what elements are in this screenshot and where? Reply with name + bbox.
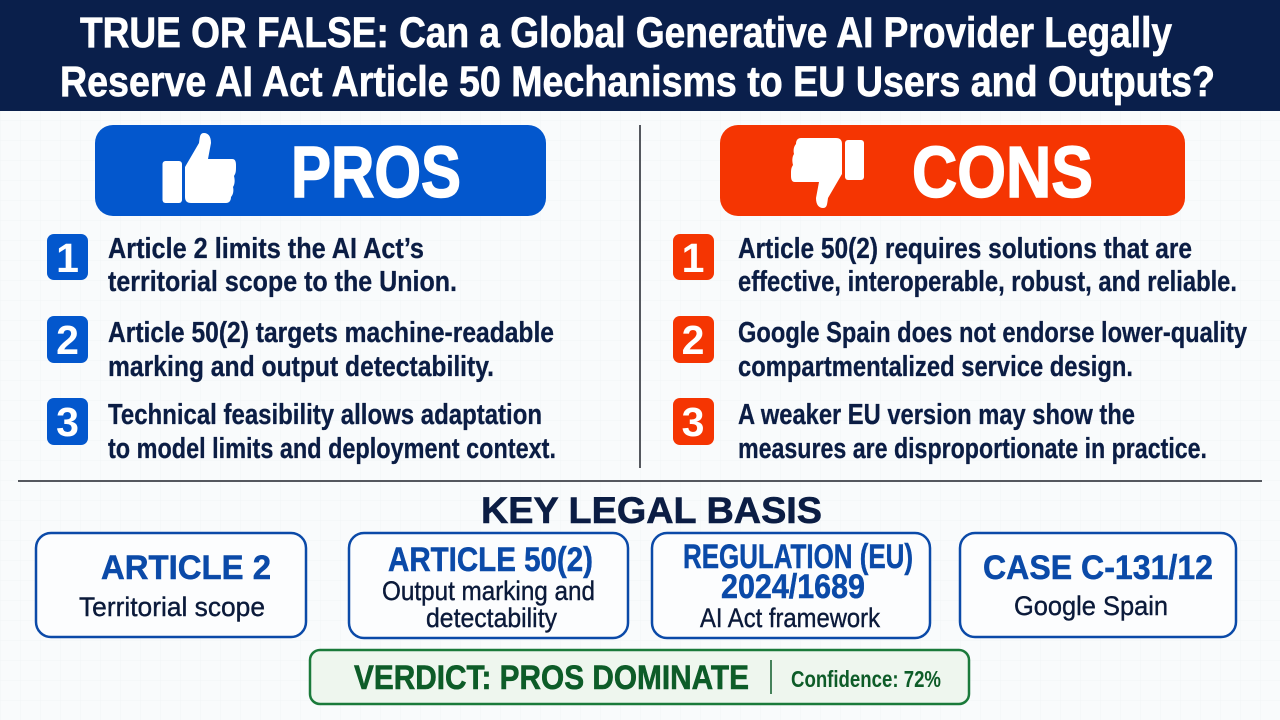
pros item 3 <box>47 398 556 465</box>
panel: cons <box>673 125 1247 465</box>
card: case c-131/12: CASE C-131/12 <box>983 549 1213 587</box>
card: regulation: AI Act framework <box>700 603 880 633</box>
pros item 3: 3 <box>56 399 79 445</box>
card: regulation <box>652 533 930 638</box>
heading: key legal basis: KEY LEGAL BASIS <box>481 490 822 531</box>
pros label: PROS <box>291 133 461 213</box>
pros header <box>95 125 546 216</box>
card: article 50(2): ARTICLE 50(2) <box>388 541 593 579</box>
cons item 2 <box>673 316 1247 383</box>
pros item 2: 2 <box>56 317 79 363</box>
pros item 2: Article 50(2) targets machine-readable <box>108 317 554 349</box>
confidence: Confidence: 72% <box>791 666 941 692</box>
card: case c-131/12: Google Spain <box>1014 591 1168 621</box>
pros item 1: territorial scope to the Union. <box>108 266 457 298</box>
cons item 2: 2 <box>682 317 704 363</box>
card: article 50(2): detectability <box>426 603 557 633</box>
pros item 2 <box>47 316 554 383</box>
panel: pros <box>47 125 556 465</box>
pros item 3: Technical feasibility allows adaptation <box>108 399 542 431</box>
card: article 2: Territorial scope <box>79 592 265 622</box>
title text <box>60 9 1215 106</box>
cons item 3: A weaker EU version may show the <box>738 399 1135 431</box>
verdict bar <box>310 650 969 704</box>
card: article 50(2) <box>349 533 628 638</box>
pros item 1: 1 <box>56 235 79 281</box>
icon: thumbs up <box>162 133 236 203</box>
cons item 2: compartmentalized service design. <box>738 351 1133 383</box>
cons item 3 <box>673 398 1207 465</box>
cons item 3: 3 <box>682 399 704 445</box>
cons header <box>720 125 1185 216</box>
pros item 2: marking and output detectability. <box>108 351 494 383</box>
title banner <box>0 0 1280 111</box>
verdict text: VERDICT: PROS DOMINATE <box>354 659 749 697</box>
card: regulation: REGULATION (EU) <box>683 538 913 576</box>
card: article 2: ARTICLE 2 <box>101 549 271 587</box>
card: regulation: 2024/1689 <box>721 568 865 606</box>
card: article 50(2): Output marking and <box>382 576 595 606</box>
pros item 1: Article 2 limits the AI Act’s <box>108 233 424 265</box>
card: article 2 <box>36 533 306 637</box>
cons item 1 <box>673 233 1237 298</box>
pros item 1 <box>47 233 457 298</box>
cons label: CONS <box>912 133 1093 213</box>
cons item 1: 1 <box>682 235 704 281</box>
icon: thumbs down <box>791 138 864 208</box>
card: case c-131/12 <box>960 533 1236 637</box>
cons item 1: Article 50(2) requires solutions that are <box>738 233 1192 265</box>
pros item 3: to model limits and deployment context. <box>108 433 556 465</box>
